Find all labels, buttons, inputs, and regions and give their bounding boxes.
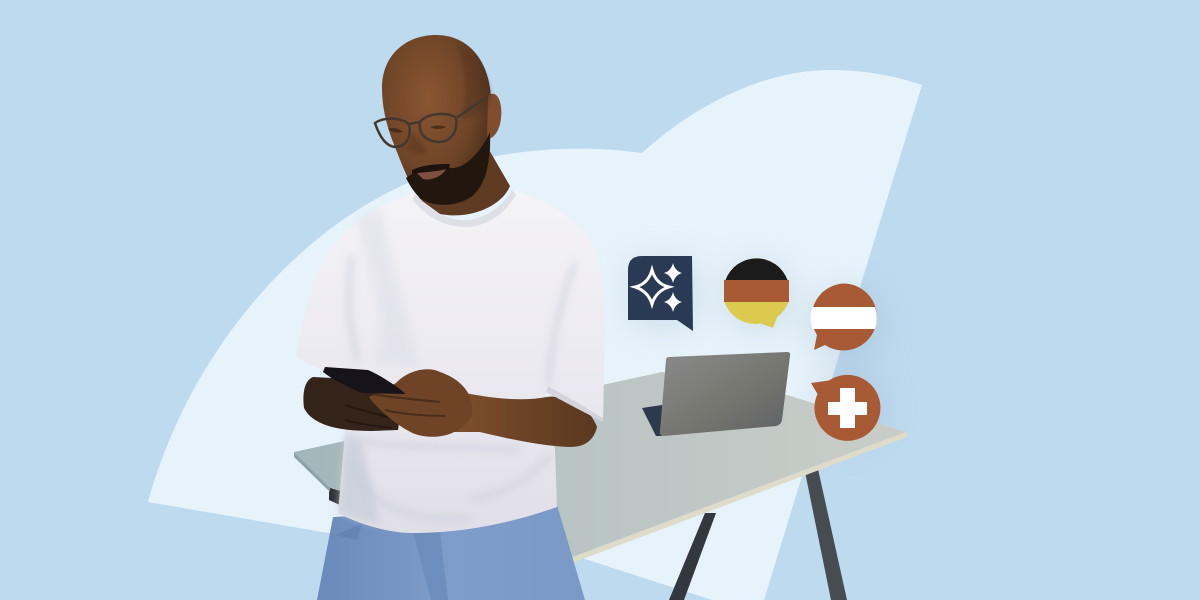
t-shirt	[296, 190, 605, 533]
person	[296, 35, 605, 600]
desk top	[294, 372, 906, 558]
neck	[418, 148, 510, 215]
icon: German flag chat bubble	[724, 258, 789, 328]
ear	[487, 94, 501, 139]
laptop	[642, 352, 790, 436]
beard	[406, 132, 490, 205]
icon shadows	[632, 262, 884, 442]
icon: Swiss flag chat bubble	[811, 375, 880, 441]
bald side shading	[455, 42, 491, 120]
jeans	[317, 505, 585, 600]
left hand and forearm	[303, 377, 402, 431]
pale background shape	[148, 70, 922, 600]
icon: Austrian flag chat bubble	[811, 284, 877, 350]
right hand	[369, 369, 472, 437]
desk legs	[669, 513, 716, 600]
eyes	[388, 126, 446, 133]
desk	[294, 372, 907, 600]
icon: AI sparkle chat bubble	[628, 256, 693, 331]
nose shadow	[406, 132, 428, 155]
glasses	[375, 97, 487, 147]
right forearm	[440, 392, 597, 447]
shirt fold shadows	[349, 255, 575, 519]
head	[382, 35, 491, 205]
shirt shadow near body	[338, 433, 380, 525]
phone	[323, 367, 406, 394]
collar	[413, 190, 516, 227]
sleeve edge	[546, 386, 603, 422]
mustache and mouth	[412, 164, 450, 174]
